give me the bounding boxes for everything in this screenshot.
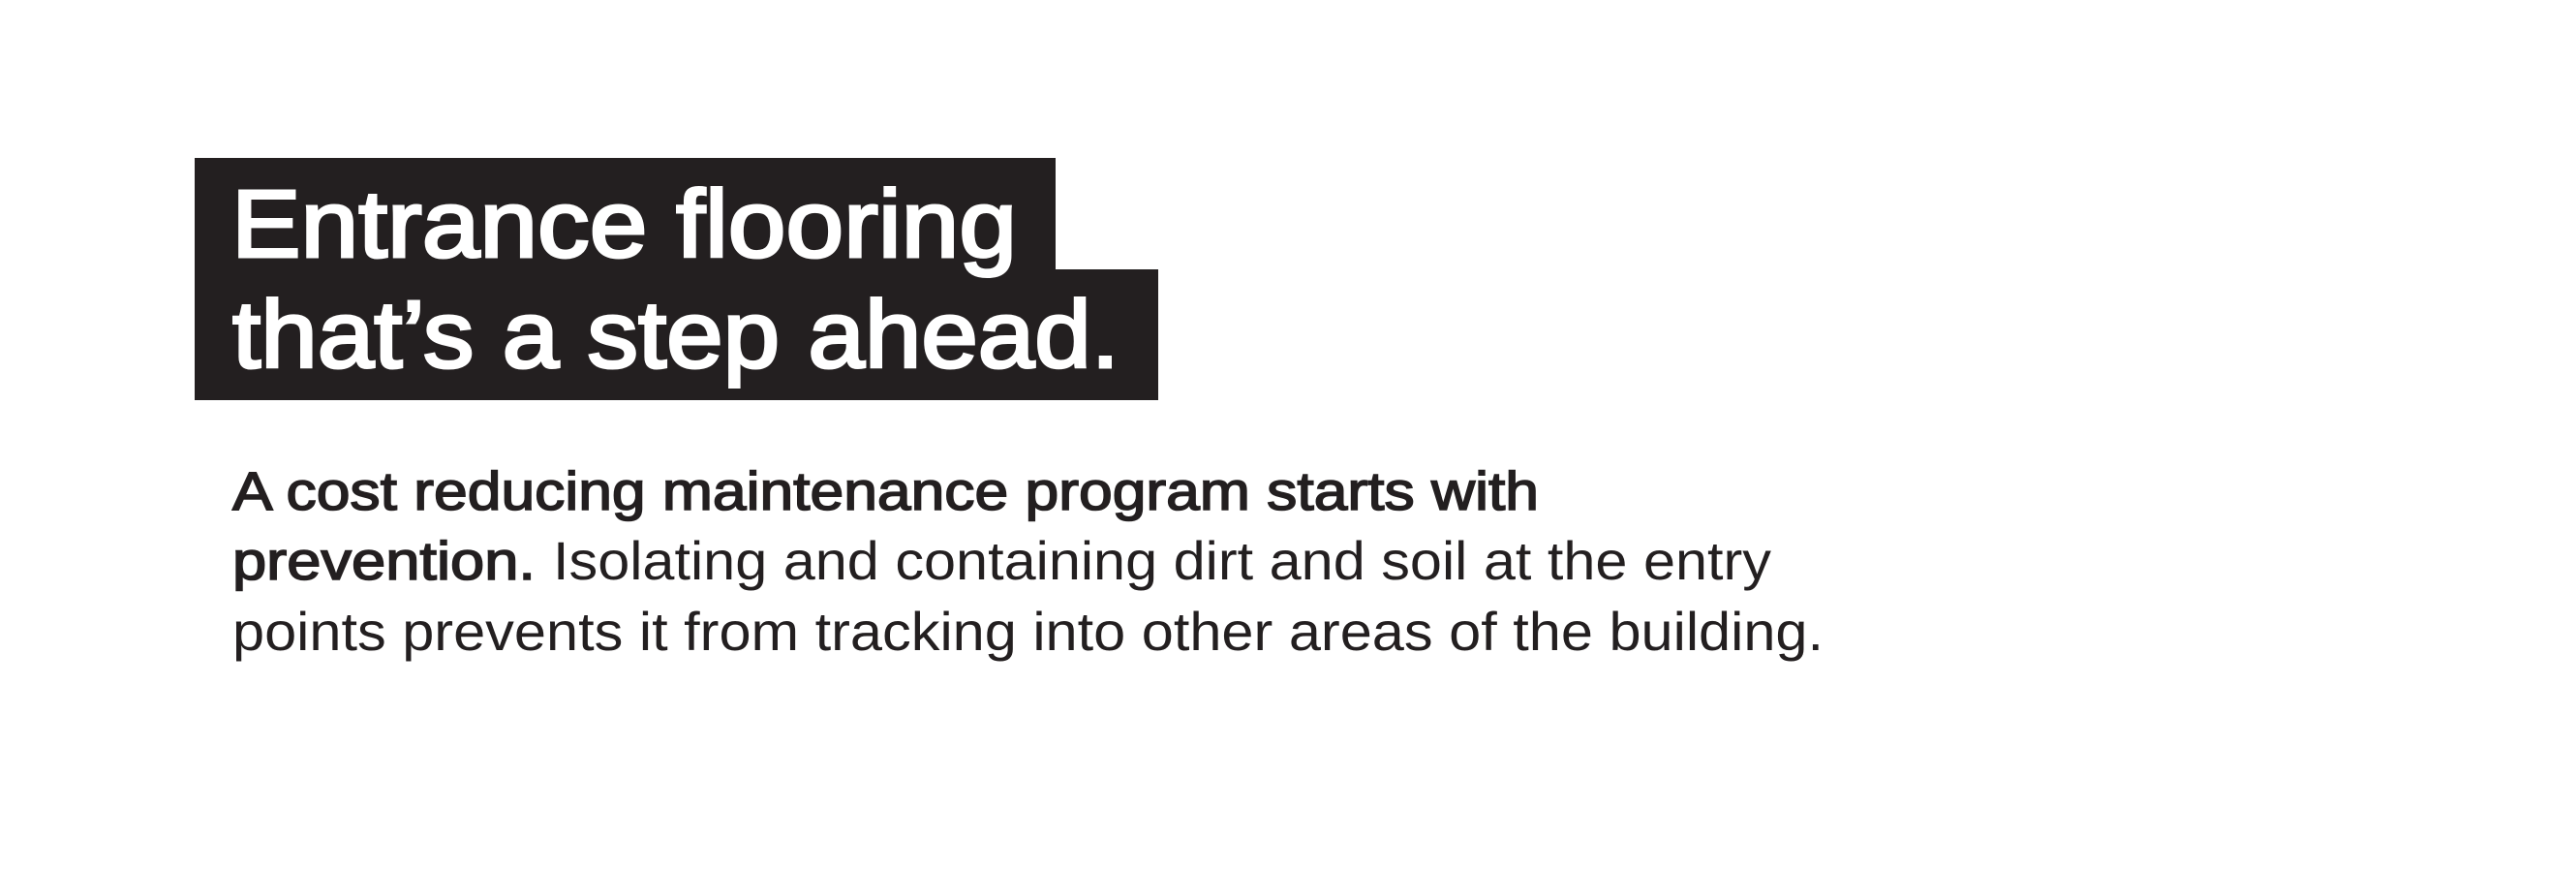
regular line 2: Isolating and containing dirt and soil at the entry (553, 530, 1771, 591)
title block (195, 158, 1158, 400)
regular line 3: points prevents it from tracking into other areas of the building. (232, 601, 1824, 662)
title line 1: Entrance flooring (231, 171, 1017, 277)
body paragraph (232, 460, 1824, 662)
bold line 2: prevention. (232, 530, 536, 591)
bold line 1: A cost reducing maintenance program starts with (232, 460, 1539, 521)
title background (195, 158, 1158, 400)
title line 2: that’s a step ahead. (232, 281, 1119, 388)
